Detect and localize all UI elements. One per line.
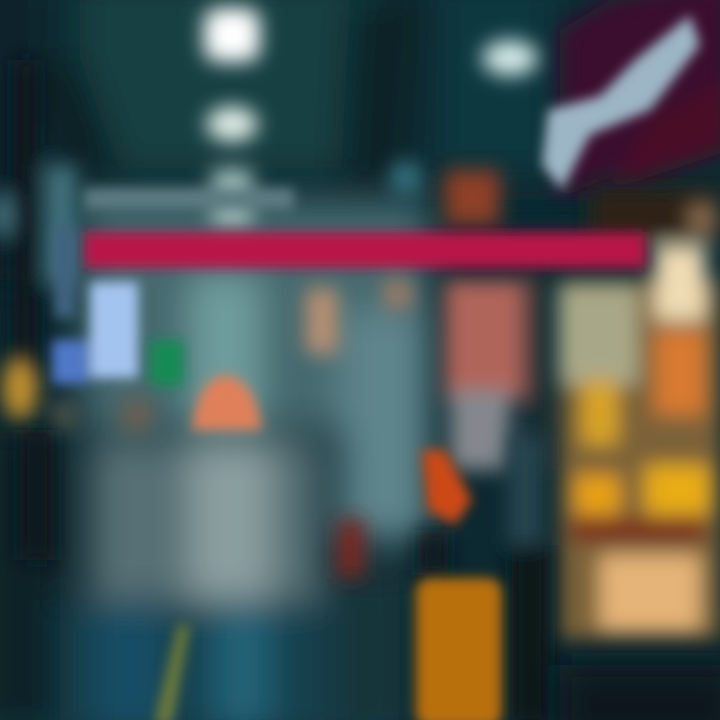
hanging blue panel	[52, 228, 138, 384]
left dark column	[0, 60, 76, 560]
hanging pale orange banners	[52, 280, 412, 432]
middle wall and floor backdrop	[0, 200, 430, 720]
floor yellow line	[154, 625, 190, 720]
orange-red pillar	[445, 170, 550, 470]
dark lower right	[560, 665, 720, 720]
person in orange	[338, 435, 548, 720]
red banner	[84, 232, 646, 268]
sign above banner	[84, 188, 294, 210]
right shop window	[558, 190, 720, 640]
ceiling	[0, 0, 720, 280]
icon: ceiling light 3	[212, 40, 538, 228]
left yellow lantern	[2, 356, 38, 420]
top right sign: maroon with pale lettering	[542, 0, 720, 200]
icon: ceiling light 1	[204, 8, 260, 62]
orange dome lamp	[192, 375, 262, 430]
green sign	[150, 340, 184, 386]
icon: ceiling light 2	[206, 106, 258, 142]
